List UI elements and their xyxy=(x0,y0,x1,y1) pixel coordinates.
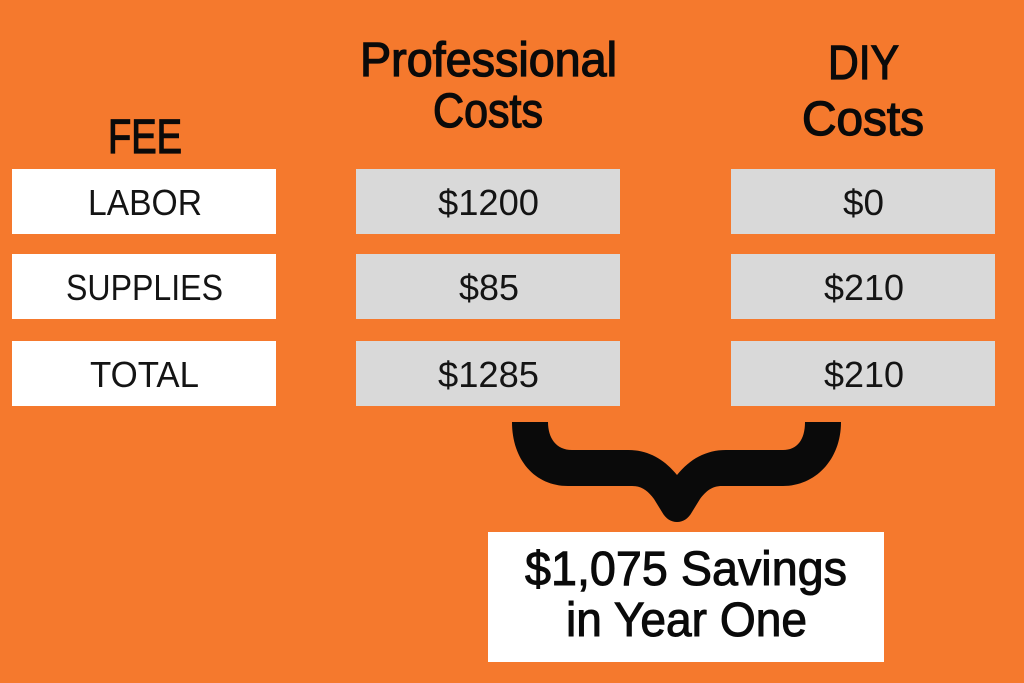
row: total: $210 xyxy=(824,354,904,395)
row: total: $1285 xyxy=(438,354,539,395)
callout: savings: in Year One xyxy=(566,594,807,647)
callout: savings xyxy=(488,532,884,662)
heading: Professional Costs: Professional xyxy=(360,34,617,87)
row: labor: $0 xyxy=(843,182,884,223)
row: supplies xyxy=(12,254,995,319)
row: total: TOTAL xyxy=(90,354,199,395)
heading: DIY Costs xyxy=(802,37,924,146)
row: supplies: SUPPLIES xyxy=(66,267,223,308)
row: supplies: $210 xyxy=(824,267,904,308)
heading: Professional Costs: Costs xyxy=(433,85,543,138)
row: labor xyxy=(12,169,995,234)
heading: DIY Costs: DIY xyxy=(828,37,899,90)
row: labor: $1200 xyxy=(438,182,539,223)
heading: FEE: FEE xyxy=(108,111,182,164)
callout: savings: $1,075 Savings xyxy=(525,543,847,596)
row: supplies: $85 xyxy=(459,267,519,308)
heading: Professional Costs xyxy=(360,34,617,138)
row: total xyxy=(12,341,995,406)
heading: DIY Costs: Costs xyxy=(802,93,924,146)
icon: curly brace xyxy=(512,422,841,522)
row: labor: LABOR xyxy=(88,182,202,223)
